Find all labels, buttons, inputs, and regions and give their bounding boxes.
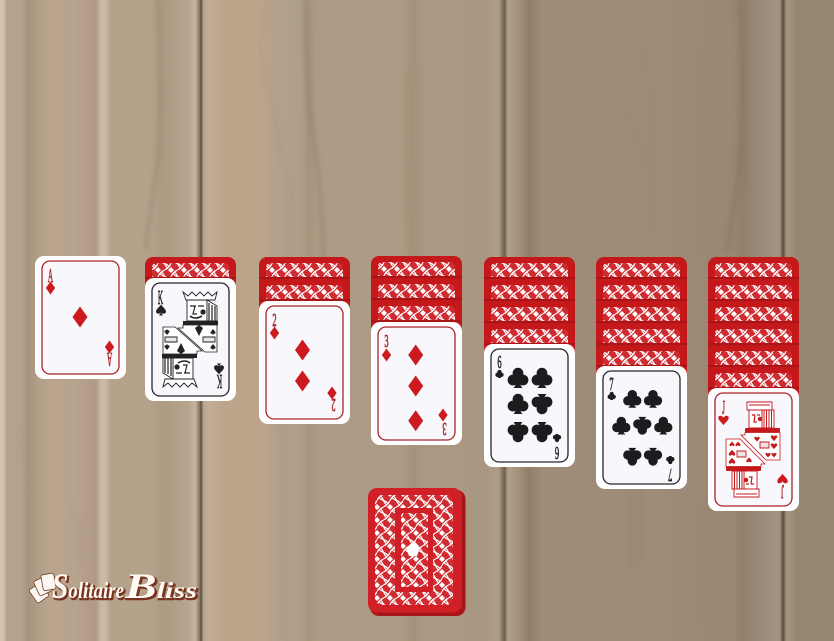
card back	[708, 367, 799, 407]
card back	[596, 257, 687, 297]
card back	[484, 301, 575, 341]
card: king of spades	[145, 278, 236, 401]
column: six of clubs	[484, 257, 575, 467]
card back	[259, 257, 350, 297]
card back	[259, 279, 350, 319]
logo wordmark: Bliss: B liss	[124, 566, 197, 606]
card back	[708, 279, 799, 319]
card: ace of diamonds	[35, 256, 126, 379]
pips	[408, 344, 423, 431]
inverted corner index: 6	[555, 442, 559, 462]
centre diamond	[72, 306, 88, 328]
card back	[145, 257, 236, 297]
logo wordmark: Solitaire: Solitaire	[52, 566, 124, 606]
rank 7: 7	[609, 375, 614, 395]
small diamond	[270, 326, 279, 340]
rank K: K	[158, 287, 163, 309]
logo icon: fanned cards	[29, 573, 56, 604]
logo wordmark shadow: Solitaire: Solitaire	[54, 568, 126, 608]
card back	[596, 301, 687, 341]
card: seven of clubs	[596, 366, 687, 489]
rank 2: 2	[272, 311, 277, 331]
inverted corner index: J	[781, 480, 784, 502]
card: three of diamonds	[371, 322, 462, 445]
column: seven of clubs	[596, 257, 687, 489]
small diamond	[46, 281, 55, 295]
back lace frame	[375, 495, 453, 605]
rank A: A	[48, 265, 53, 287]
card back	[596, 279, 687, 319]
card back	[708, 257, 799, 297]
rank J: J	[722, 397, 725, 419]
small club	[495, 370, 504, 378]
card back	[484, 257, 575, 297]
inverted corner index: A	[107, 348, 112, 370]
small club	[608, 392, 616, 400]
jack figure	[726, 402, 780, 497]
card back	[371, 278, 462, 318]
card back	[371, 256, 462, 296]
logo wordmark shadow: Bliss: B liss	[125, 568, 199, 608]
centre emblem	[406, 541, 420, 556]
card: six of clubs	[484, 344, 575, 467]
pips	[295, 340, 310, 392]
inverted corner index: 3	[442, 418, 447, 438]
small spade	[156, 304, 166, 316]
card back	[484, 323, 575, 363]
inverted corner index: K	[217, 370, 222, 392]
stock pile: face-down deck	[368, 488, 466, 616]
small diamond	[382, 348, 391, 362]
card back	[596, 323, 687, 363]
column: two of diamonds	[259, 257, 350, 424]
column: three of diamonds	[371, 256, 462, 445]
king figure	[162, 292, 218, 387]
rank 6: 6	[497, 353, 502, 373]
logo: Solitaire Bliss	[29, 566, 199, 608]
card back	[708, 345, 799, 385]
inverted corner index: 7	[668, 464, 672, 484]
pips	[612, 390, 672, 466]
inverted corner index: 2	[331, 394, 336, 414]
back centre panel	[401, 513, 428, 587]
card back	[371, 300, 462, 340]
small heart	[718, 416, 729, 425]
card back	[484, 279, 575, 319]
card: jack of hearts	[708, 388, 799, 511]
pips	[508, 368, 552, 442]
card back	[708, 323, 799, 363]
card back	[708, 301, 799, 341]
card: two of diamonds	[259, 301, 350, 424]
rank 3: 3	[384, 332, 389, 352]
column: jack of hearts	[708, 257, 799, 511]
card back	[596, 345, 687, 385]
column: king of spades	[145, 257, 236, 401]
